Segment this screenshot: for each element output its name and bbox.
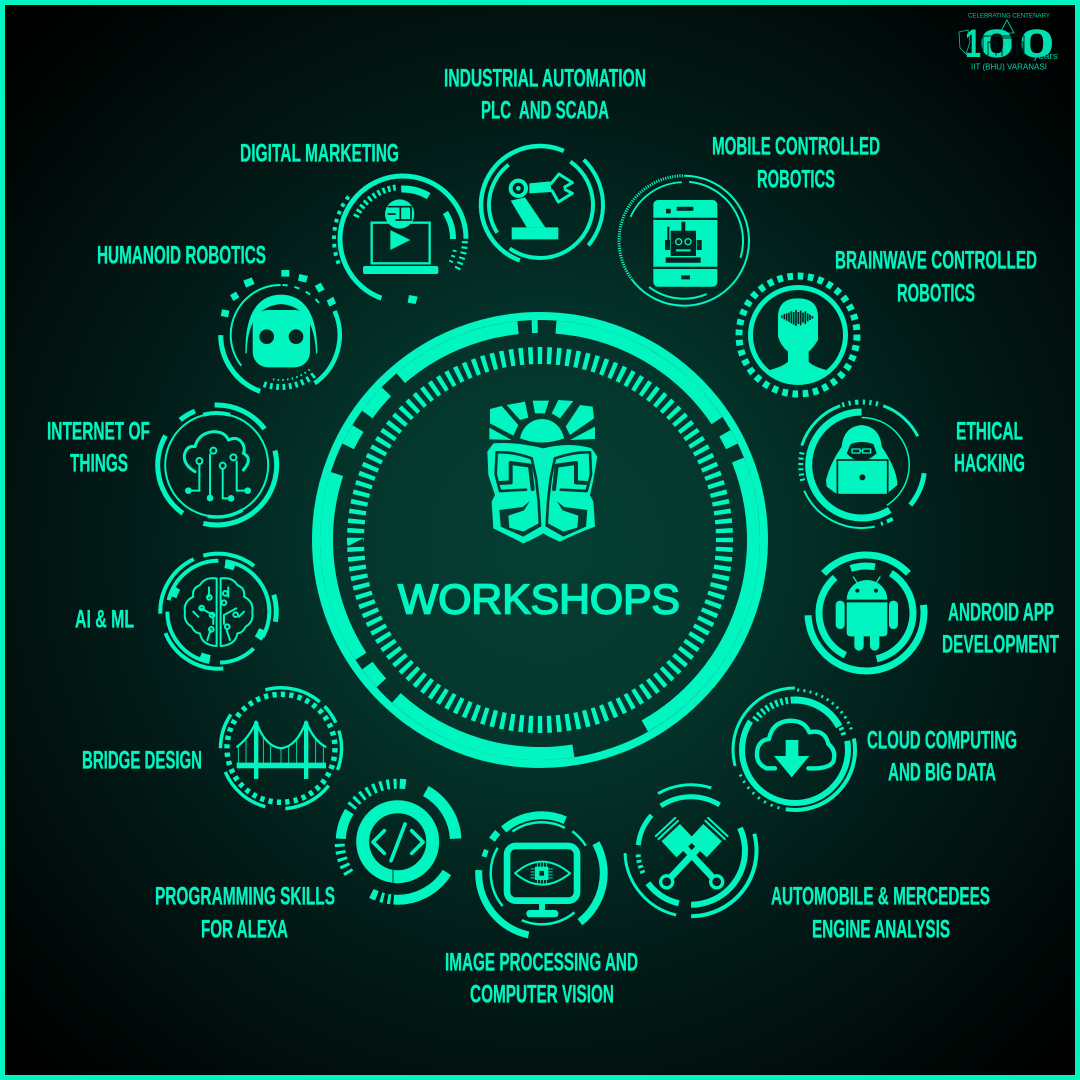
label: MOBILE CONTROLLED xyxy=(712,132,880,160)
icon: circuit brain xyxy=(146,539,291,684)
label xyxy=(155,882,335,944)
icon: robot head xyxy=(203,257,359,413)
label: ETHICAL xyxy=(956,418,1023,446)
logo number 100: 1 xyxy=(965,22,981,66)
label: IMAGE PROCESSING AND xyxy=(445,948,638,976)
label xyxy=(47,418,150,478)
panel: automobile and mercedees engine analysis xyxy=(601,761,990,944)
panel: ethical hacking xyxy=(777,380,1025,550)
icon: sun totem logo xyxy=(487,400,597,543)
label xyxy=(954,418,1025,478)
celebrating centenary logo xyxy=(959,12,1059,72)
logo heading: CELEBRATING CENTENARY xyxy=(968,12,1051,20)
label xyxy=(712,132,880,194)
label: FOR ALEXA xyxy=(201,916,288,944)
label xyxy=(771,882,990,944)
icon: suspension bridge xyxy=(195,663,367,834)
label: INTERNET OF xyxy=(47,418,150,446)
label xyxy=(444,64,646,124)
label: PLC AND SCADA xyxy=(481,96,609,124)
logo gate drawing xyxy=(959,20,1024,56)
icon: hacker with laptop xyxy=(777,380,946,550)
label: AI & ML xyxy=(75,606,134,634)
central hub xyxy=(238,238,842,842)
panel: android app development xyxy=(784,531,1059,695)
label xyxy=(445,948,638,1008)
label: HUMANOID ROBOTICS xyxy=(97,242,266,270)
panel: digital marketing xyxy=(240,140,492,328)
icon: circuit cloud xyxy=(135,383,299,547)
panel: brainwave controlled robotics xyxy=(739,246,1037,394)
tick ring xyxy=(353,353,727,727)
label: INDUSTRIAL AUTOMATION xyxy=(444,64,646,92)
title: workshops: WORKSHOPS xyxy=(398,576,680,622)
icon: cloud download xyxy=(719,674,871,826)
icon: android robot xyxy=(784,531,948,695)
panel: image processing and computer vision xyxy=(445,789,638,1008)
logo number 100: 00 xyxy=(979,22,1055,66)
icon: laptop with play xyxy=(314,150,492,328)
label xyxy=(835,246,1037,308)
label xyxy=(867,726,1017,786)
icon: robot arm xyxy=(451,116,629,294)
label: AND BIG DATA xyxy=(888,758,996,786)
icon: crossed pistons xyxy=(601,761,781,941)
label: HACKING xyxy=(954,450,1025,478)
panel: programming skills for alexa xyxy=(155,760,479,944)
label: DIGITAL MARKETING xyxy=(240,140,399,168)
label: ROBOTICS xyxy=(897,280,975,308)
label: COMPUTER VISION xyxy=(470,980,614,1008)
label: THINGS xyxy=(70,450,128,478)
icon: alexa code bubble xyxy=(316,760,479,923)
panel: bridge design xyxy=(82,663,367,834)
label: ENGINE ANALYSIS xyxy=(812,916,950,944)
label xyxy=(942,598,1059,658)
logo years: years xyxy=(1033,51,1059,61)
icon: phone with robot xyxy=(607,163,761,318)
label: BRIDGE DESIGN xyxy=(82,746,202,774)
icon: head with brainwave xyxy=(739,276,857,394)
logo institute: IIT (BHU) VARANASI xyxy=(971,62,1047,72)
panel: industrial automation xyxy=(444,64,646,294)
panel: mobile controlled robotics xyxy=(607,132,880,318)
panel: ai and ml xyxy=(75,539,291,684)
panel: cloud computing and big data xyxy=(719,674,1017,826)
label: PROGRAMMING SKILLS xyxy=(155,882,335,910)
panel: humanoid robotics xyxy=(97,242,359,413)
icon: monitor with eye xyxy=(457,789,626,958)
panel: internet of things xyxy=(47,383,299,547)
main segmented ring xyxy=(238,238,842,842)
label: ROBOTICS xyxy=(757,166,835,194)
